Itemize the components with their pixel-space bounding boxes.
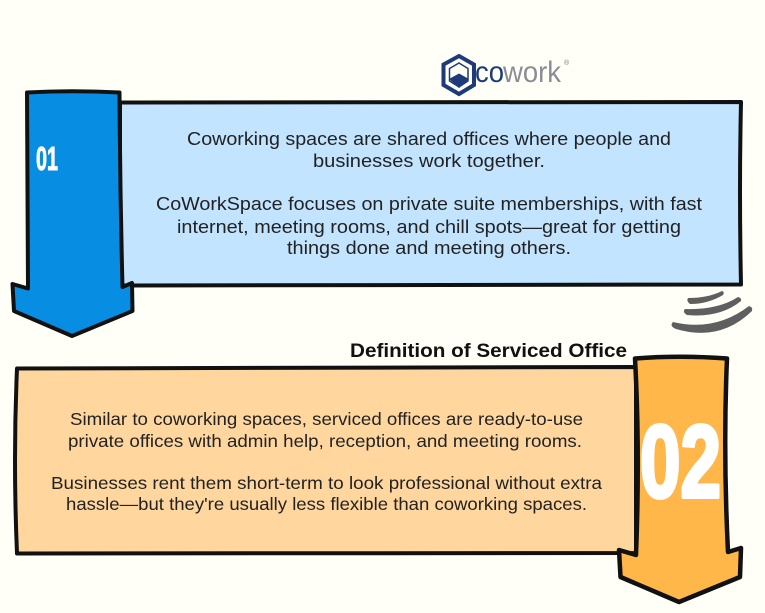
logo registered mark: ® xyxy=(564,59,570,67)
text block: serviced office description: private offices with admin help, reception, and meeting rooms. xyxy=(68,431,582,451)
text block: coworking description: businesses work together. xyxy=(313,150,545,171)
panel: serviced office definition xyxy=(15,367,636,554)
text block: coworking description: internet, meeting rooms, and chill spots—great for getting xyxy=(177,216,681,237)
icon: hexagon logo mark xyxy=(444,56,474,94)
text block: serviced office description: Similar to coworking spaces, serviced offices are ready-to-use xyxy=(70,409,583,429)
text block: coworking description xyxy=(156,128,702,258)
logo: cowork xyxy=(444,56,570,94)
panel background xyxy=(120,102,741,286)
panel: coworking definition xyxy=(120,102,741,286)
heading: definition of serviced office: Definition of Serviced Office xyxy=(350,341,627,362)
text block: coworking description: Coworking spaces are shared offices where people and xyxy=(187,128,671,149)
text block: serviced office description: hassle—but they're usually less flexible than coworking spaces. xyxy=(66,494,587,514)
text block: serviced office description xyxy=(51,409,602,514)
text block: coworking description: CoWorkSpace focuses on private suite memberships, with fast xyxy=(156,193,702,214)
arrow: orange 02 xyxy=(619,357,741,602)
logo wordmark: co: co xyxy=(475,56,504,89)
text block: serviced office description: Businesses rent them short-term to look professional without extra xyxy=(51,473,602,493)
arrow shape xyxy=(12,91,132,336)
decorative swoosh icon xyxy=(672,291,752,333)
logo wordmark: work: work xyxy=(502,56,562,89)
panel background xyxy=(15,367,636,554)
number 02: 02 xyxy=(640,404,721,519)
text block: coworking description: things done and meeting others. xyxy=(287,237,571,258)
number 01: 01 xyxy=(36,140,58,177)
arrow: blue 01 xyxy=(12,91,132,336)
arrow shape xyxy=(619,357,741,602)
